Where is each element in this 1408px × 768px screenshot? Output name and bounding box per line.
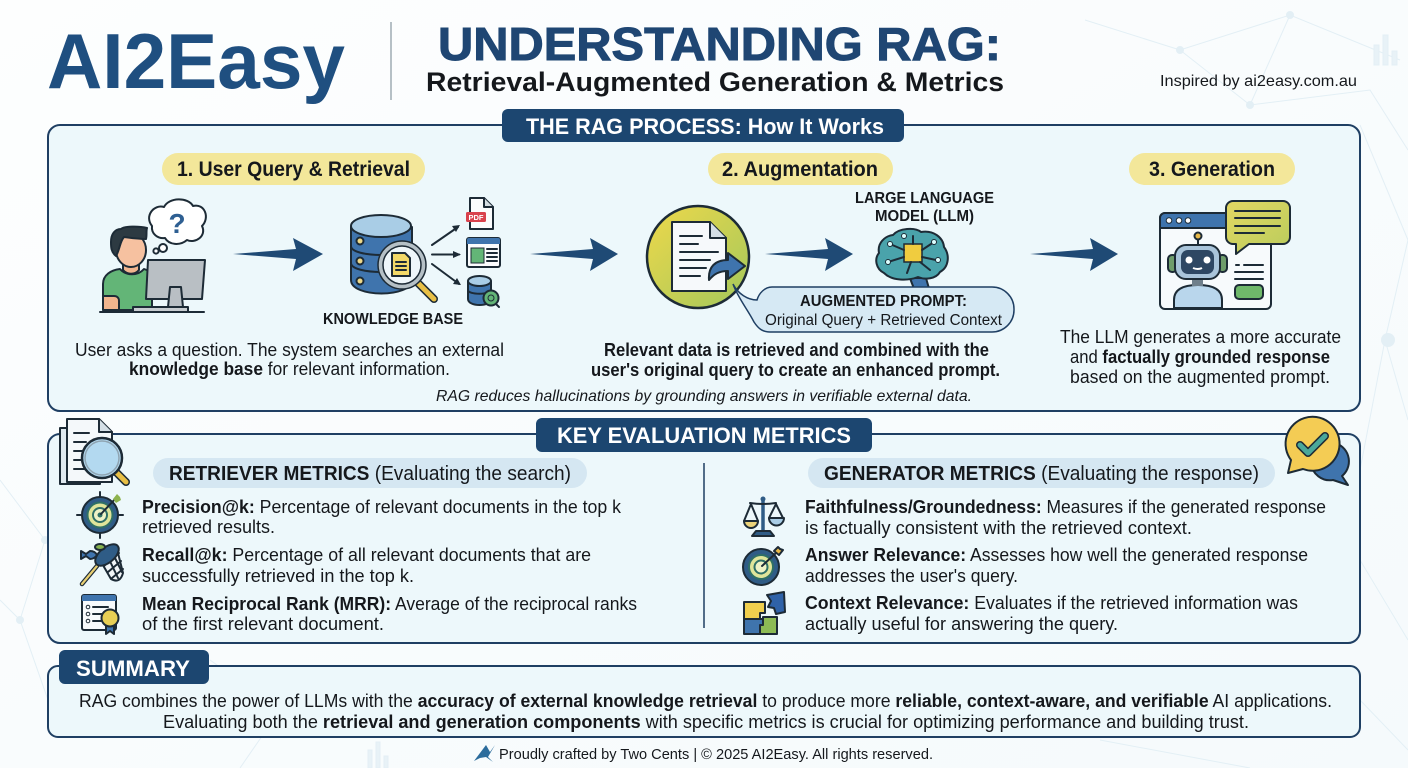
metric: answer relevance: Answer Relevance: Assesses how well the generated response <box>805 545 1308 565</box>
icon: web page <box>467 238 500 267</box>
heading: retriever metrics <box>153 458 587 488</box>
step 2 heading <box>708 153 893 185</box>
heading: generator metrics <box>808 458 1275 488</box>
LLM label: MODEL (LLM) <box>875 208 974 225</box>
metric: answer relevance <box>805 545 1308 586</box>
metric: mean reciprocal rank: of the first relevant document. <box>142 614 384 634</box>
knowledge base label: KNOWLEDGE BASE <box>323 311 463 328</box>
title <box>426 18 1004 97</box>
panel: summary <box>48 650 1360 737</box>
metric: recall at k <box>142 545 591 586</box>
metric: context relevance <box>805 593 1298 634</box>
icon: footer logo <box>474 745 495 762</box>
callout: augmented prompt: Original Query + Retrieved Context <box>765 312 1003 329</box>
process footnote: RAG reduces hallucinations by grounding answers in verifiable external data. <box>436 388 972 405</box>
icon: knowledge base database <box>351 215 434 299</box>
heading: key evaluation metrics <box>536 418 872 452</box>
heading: generator metrics: GENERATOR METRICS (Evaluating the response) <box>824 463 1259 485</box>
heading: RAG process <box>502 109 904 142</box>
metric: precision at k <box>142 497 622 537</box>
icon: small database <box>468 276 499 307</box>
LLM label: LARGE LANGUAGE <box>855 190 994 207</box>
icon: puzzle pieces <box>744 592 785 634</box>
step 2 heading: 2. Augmentation <box>722 157 878 181</box>
metric: faithfulness <box>805 497 1326 538</box>
heading: summary <box>59 650 209 684</box>
heading: RAG process: THE RAG PROCESS: How It Works <box>526 114 884 139</box>
title: UNDERSTANDING RAG: <box>438 18 1001 70</box>
title: Retrieval-Augmented Generation & Metrics <box>426 67 1004 97</box>
metric: context relevance: actually useful for answering the query. <box>805 614 1118 634</box>
icon: relevance target <box>743 547 783 585</box>
step 3 description: and factually grounded response <box>1070 347 1330 367</box>
step 1 description <box>75 340 504 379</box>
metric: context relevance: Context Relevance: Evaluates if the retrieved information was <box>805 593 1298 613</box>
icon: robot response window <box>1160 201 1290 309</box>
step 1 description: User asks a question. The system searches an external <box>75 340 504 360</box>
icon: document search <box>60 419 126 484</box>
callout: augmented prompt: AUGMENTED PROMPT: <box>800 293 967 310</box>
step 1 heading: 1. User Query & Retrieval <box>177 157 410 181</box>
metric: faithfulness: Faithfulness/Groundedness: Measures if the generated response <box>805 497 1326 517</box>
arrow: LLM to generation <box>1030 238 1118 271</box>
summary text <box>79 691 1332 732</box>
icon: LLM brain <box>876 229 948 292</box>
icon: chat check <box>1286 417 1349 485</box>
icon: ranked list medal <box>82 595 118 634</box>
metric: mean reciprocal rank <box>142 594 637 634</box>
metric: faithfulness: is factually consistent with the retrieved context. <box>805 518 1192 538</box>
step 3 description <box>1060 327 1341 387</box>
LLM label <box>855 190 994 225</box>
metric: answer relevance: addresses the user's query. <box>805 566 1018 586</box>
icon: precision target <box>77 492 123 538</box>
step 1 description: knowledge base for relevant information. <box>129 359 450 379</box>
icon: PDF file <box>466 198 493 229</box>
heading: retriever metrics: RETRIEVER METRICS (Evaluating the search) <box>169 463 571 485</box>
icon: balance scale <box>744 496 784 536</box>
panel: RAG process <box>48 109 1360 411</box>
metric: precision at k: Precision@k: Percentage of relevant documents in the top k <box>142 497 622 517</box>
icon: PDF file: PDF <box>468 213 484 222</box>
icon: augmented document <box>647 206 749 308</box>
icon: recall net <box>81 540 123 584</box>
panel: key evaluation metrics <box>48 417 1360 643</box>
logo wordmark: AI2Easy <box>47 17 345 105</box>
arrow: augmentation to LLM <box>765 238 853 271</box>
icon: user at computer <box>100 199 206 312</box>
icon: sources fan-out arrows <box>432 225 461 285</box>
metric: recall at k: Recall@k: Percentage of all relevant documents that are <box>142 545 591 565</box>
step 2 description: Relevant data is retrieved and combined with the <box>604 340 989 360</box>
step 3 heading: 3. Generation <box>1149 157 1275 181</box>
icon: user at computer: ? <box>168 208 186 239</box>
step 3 description: based on the augmented prompt. <box>1070 367 1330 387</box>
summary text: RAG combines the power of LLMs with the accuracy of external knowledge retrieval to produce more reliable, context-aware, and verifiable AI applications. <box>79 691 1332 711</box>
callout: augmented prompt <box>733 284 1014 332</box>
metric: mean reciprocal rank: Mean Reciprocal Rank (MRR): Average of the reciprocal ranks <box>142 594 637 614</box>
step 2 description: user's original query to create an enhanced prompt. <box>591 360 1000 380</box>
summary text: Evaluating both the retrieval and generation components with specific metrics is crucial for optimizing performance and building trust. <box>163 712 1249 732</box>
step 1 heading <box>162 153 425 185</box>
heading: summary: SUMMARY <box>76 656 190 681</box>
step 2 description <box>591 340 1000 380</box>
attribution: Inspired by ai2easy.com.au <box>1160 73 1357 90</box>
step 3 heading <box>1129 153 1295 185</box>
arrow: query to knowledge base <box>233 238 323 271</box>
step 3 description: The LLM generates a more accurate <box>1060 327 1341 347</box>
heading: key evaluation metrics: KEY EVALUATION METRICS <box>557 423 851 448</box>
arrow: retrieval to augmentation <box>530 238 618 271</box>
footer: Proudly crafted by Two Cents | © 2025 AI2Easy. All rights reserved. <box>499 747 933 763</box>
metric: recall at k: successfully retrieved in the top k. <box>142 566 414 586</box>
metric: precision at k: retrieved results. <box>142 517 275 537</box>
